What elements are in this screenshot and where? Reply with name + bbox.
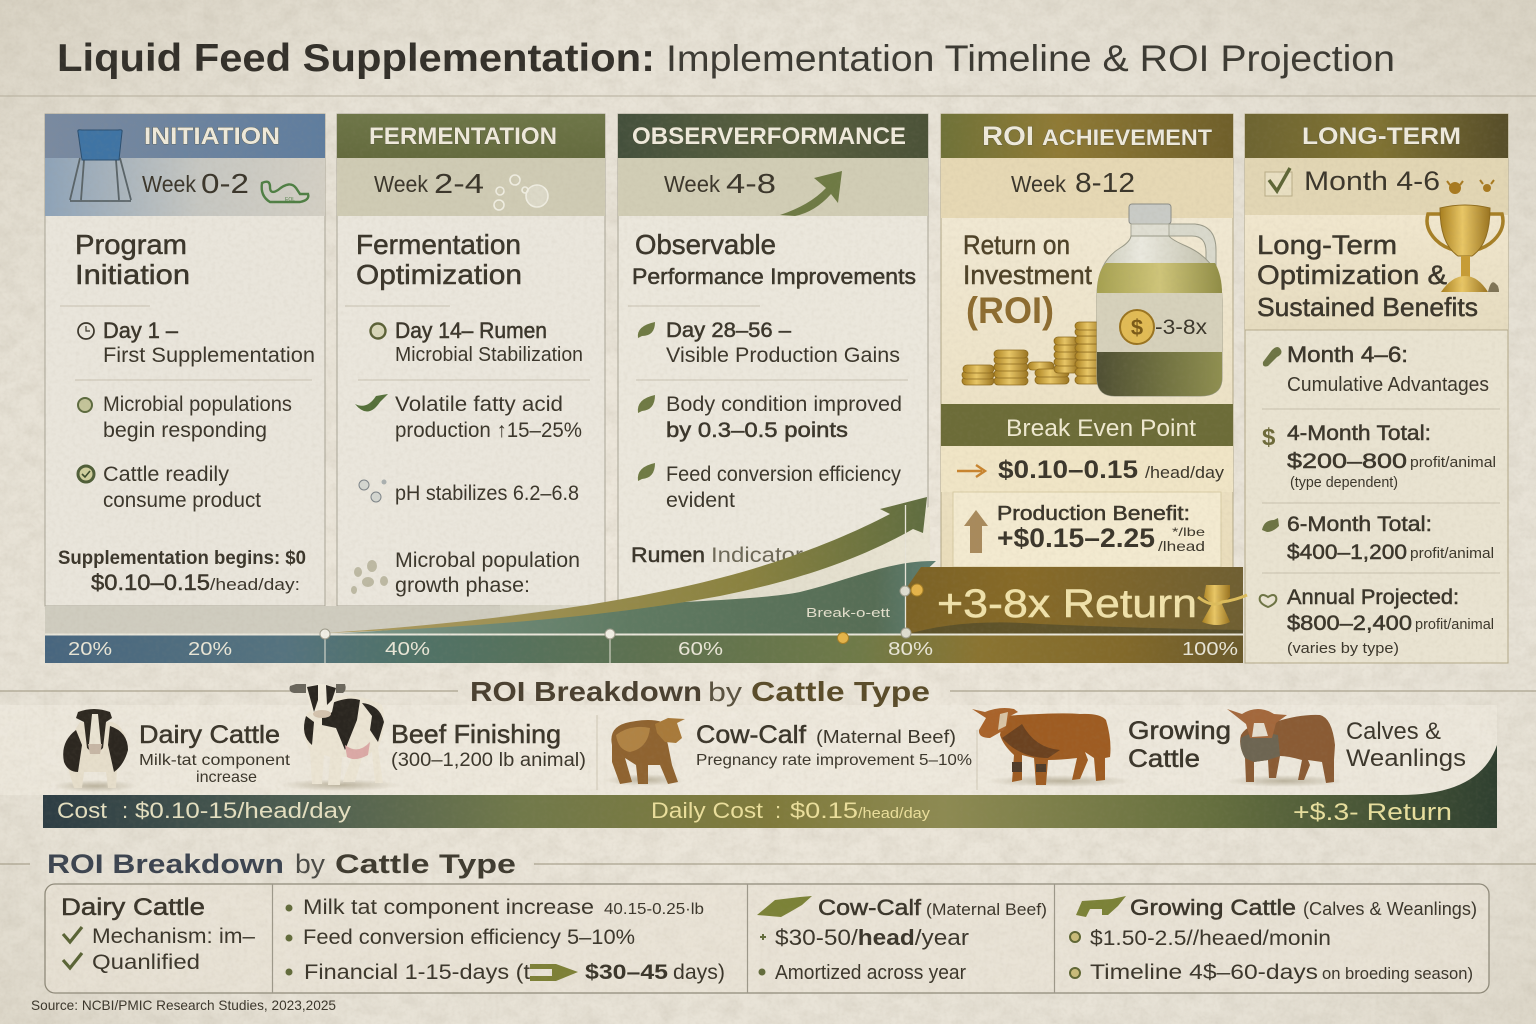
item: day 1: Day 1 – xyxy=(103,318,179,343)
section heading: ROI breakdown by cattle type (lower): ROI Breakdown xyxy=(47,849,284,879)
ribbon: cost left: : xyxy=(122,798,128,823)
item: rumen indicator: Rumen xyxy=(631,544,705,567)
item: day 14 xyxy=(370,318,583,366)
item: microbial xyxy=(78,393,292,442)
icon: bubbles xyxy=(494,175,548,210)
title: Implementation Timeline & ROI Projection xyxy=(666,38,1395,79)
item: annual projected: $800–2,400 xyxy=(1287,612,1412,635)
production benefit: +$0.15–2.25 xyxy=(997,523,1155,553)
section heading: ROI breakdown by cattle type (lower): by xyxy=(295,849,326,879)
cattle type: cow-calf label: (Maternal Beef) xyxy=(816,727,956,747)
week label: Week xyxy=(1011,171,1066,197)
item: annual projected xyxy=(1260,586,1494,657)
ribbon: cost left: Cost xyxy=(57,798,107,823)
week label: 4-8 xyxy=(726,168,776,199)
item: annual projected: profit/animal xyxy=(1415,616,1494,633)
cow: beef finishing xyxy=(280,684,400,791)
cow: growing cattle xyxy=(972,708,1135,787)
timeline percent labels: 80% xyxy=(888,639,933,659)
table cell: dairy benefits xyxy=(286,896,725,984)
item: body condition: Body condition improved xyxy=(666,393,902,416)
icon: green badge xyxy=(262,182,308,203)
item: cattle consume: Cattle readily xyxy=(103,463,230,486)
icon: dollar coin with 3-8x: $ xyxy=(1131,315,1143,340)
heading: program initiation: Initiation xyxy=(75,259,190,290)
table cell: cow-calf: Cow-Calf xyxy=(818,895,922,920)
section heading: ROI breakdown by cattle type (upper): Cattle Type xyxy=(751,676,930,707)
supplementation cost: Supplementation begins: $0 xyxy=(58,548,306,569)
title: Liquid Feed Supplementation: xyxy=(57,37,655,80)
month label: Month 4-6 xyxy=(1304,166,1440,196)
heading: observable performance improvements: Performance Improvements xyxy=(632,264,916,289)
item: microbial growth xyxy=(351,549,580,597)
ribbon: daily cost xyxy=(651,798,931,823)
heading: ROI ACHIEVEMENT xyxy=(982,121,1213,151)
item: feed conversion: evident xyxy=(666,489,735,512)
table cell: cow-calf: Amortized across year xyxy=(775,962,966,984)
ribbon: return: +$.3- Return xyxy=(1293,799,1452,826)
cattle type: dairy label: Dairy Cattle xyxy=(139,721,280,749)
icon: gold funnel xyxy=(1198,585,1247,625)
cattle type: growing cattle label: Cattle xyxy=(1128,745,1200,773)
week label xyxy=(664,168,776,199)
item: rumen indicator xyxy=(631,544,803,567)
heading: ROI ACHIEVEMENT: ROI xyxy=(982,121,1034,151)
timeline progress bar xyxy=(45,497,1247,663)
chart: +3-8x return block xyxy=(905,567,1243,635)
break even header: Break Even Point xyxy=(1006,415,1196,442)
item: pH: pH stabilizes 6.2–6.8 xyxy=(395,482,579,505)
item: day 28-56: Visible Production Gains xyxy=(666,344,900,367)
heading: LONG-TERM: LONG-TERM xyxy=(1302,123,1461,150)
heading: fermentation optimization: Optimization xyxy=(356,259,522,290)
ribbon: daily cost: : xyxy=(775,798,781,823)
heading: return on investment xyxy=(963,230,1092,331)
section heading: ROI breakdown by cattle type (upper) xyxy=(470,676,930,707)
heading: OBSERVERFORMANCE: OBSERVERFORMANCE xyxy=(632,123,906,150)
panel: initiation, week 0-2 xyxy=(45,114,325,606)
item: volatile fatty acid: production ↑15–25% xyxy=(395,419,582,442)
week label: 2-4 xyxy=(434,168,484,199)
supplementation cost: /head/day: xyxy=(210,575,300,594)
cattle type: growing cattle label xyxy=(1128,717,1231,773)
heading: observable performance improvements: Observable xyxy=(635,229,776,260)
heading: return on investment: (ROI) xyxy=(966,290,1054,331)
cattle type: growing cattle label: Growing xyxy=(1128,717,1231,745)
week label: Week xyxy=(374,171,428,197)
heading: program initiation: Program xyxy=(75,229,187,260)
production benefit: */lbe xyxy=(1172,525,1205,539)
item: volatile fatty acid: Volatile fatty acid xyxy=(395,393,563,416)
icon: dollar coin with 3-8x xyxy=(1120,310,1208,344)
icon: dollar coin with 3-8x: -3-8x xyxy=(1155,316,1208,339)
cattle type: dairy label: increase xyxy=(196,769,257,786)
item: microbial growth: growth phase: xyxy=(395,574,530,597)
cattle type: cow-calf label xyxy=(696,721,972,769)
item: 4-month total: $200–800 xyxy=(1287,450,1407,473)
cattle type: beef finishing label: Beef Finishing xyxy=(391,719,561,749)
table cell: dairy cattle: Mechanism: im– xyxy=(92,925,255,948)
item: microbial: begin responding xyxy=(103,419,267,442)
week label: Week xyxy=(142,171,196,197)
table cell: cow-calf xyxy=(757,895,1047,984)
heading: long-term optimization: Sustained Benefits xyxy=(1257,292,1478,322)
icon: gold coins xyxy=(962,322,1103,385)
ribbon: cost left: $0.10-15/head/day xyxy=(135,798,351,823)
item: body condition xyxy=(638,393,902,442)
timeline percent labels: 40% xyxy=(385,639,430,659)
heading: fermentation optimization: Fermentation xyxy=(356,229,521,260)
table cell: dairy cattle: Quanlified xyxy=(92,951,200,974)
heading: long-term optimization: Long-Term xyxy=(1257,230,1397,260)
item: 4-month total xyxy=(1262,422,1496,491)
table cell: dairy benefits: Financial 1-15-days (t xyxy=(304,961,530,984)
item: month 4-6 cumulative: Cumulative Advantages xyxy=(1287,374,1489,396)
heading: return on investment: Return on xyxy=(963,230,1070,260)
panel: long-term, month 4-6 xyxy=(1245,114,1508,663)
panel: ROI achievement, week 8-12 xyxy=(941,114,1233,606)
table cell: growing cattle: (Calves & Weanlings) xyxy=(1303,899,1477,919)
panel: fermentation, week 2-4 xyxy=(337,114,605,606)
callout: +3-8x return: +3-8x Return xyxy=(937,582,1197,626)
item: microbial: Microbial populations xyxy=(103,393,292,416)
section heading: ROI breakdown by cattle type (lower): Cattle Type xyxy=(335,849,516,879)
week label xyxy=(374,168,484,199)
table cell: dairy benefits: 40.15-0.25·lb xyxy=(604,901,704,918)
table cell: growing cattle: Timeline 4$–60-days xyxy=(1090,961,1318,984)
table cell: dairy benefits: Feed conversion efficiency 5–10% xyxy=(303,926,635,949)
ribbon: daily cost: Daily Cost xyxy=(651,798,763,823)
item: annual projected: Annual Projected: xyxy=(1287,586,1459,609)
supplementation cost xyxy=(58,548,306,595)
week label: 0-2 xyxy=(201,168,249,199)
chart: pale band under arrow xyxy=(500,505,930,616)
heading: FERMENTATION: FERMENTATION xyxy=(369,123,557,150)
cattle type: calves and weanlings label xyxy=(1346,718,1466,772)
icon: rising arrow xyxy=(780,171,842,216)
heading: return on investment: Investment xyxy=(963,260,1092,290)
item: day 28-56 xyxy=(638,319,900,367)
cattle type: beef finishing label: (300–1,200 lb animal) xyxy=(391,750,586,771)
ribbon: cost left xyxy=(57,798,351,823)
table cell: growing cattle: Growing Cattle xyxy=(1130,895,1296,920)
break-even marker label: Break-o-ett xyxy=(806,605,890,620)
week label xyxy=(142,168,249,199)
table cell: growing cattle xyxy=(1070,895,1477,984)
week label: Week xyxy=(664,171,720,197)
section heading: ROI breakdown by cattle type (upper): ROI Breakdown xyxy=(470,676,702,707)
item: day 28-56: Day 28–56 – xyxy=(666,319,791,342)
table cell: cow-calf: $30-50/ head /year xyxy=(775,925,969,950)
cattle type: cow-calf label: Pregnancy rate improvement 5–10% xyxy=(696,752,972,769)
production benefit: /lhead xyxy=(1158,538,1205,554)
table cell: cow-calf: (Maternal Beef) xyxy=(926,900,1047,919)
table cell: growing cattle: $1.50-2.5//heaed/monin xyxy=(1090,927,1331,950)
item: rumen indicator: Indicator xyxy=(711,544,803,567)
timeline percent labels: 60% xyxy=(678,639,723,659)
heading: ROI ACHIEVEMENT: ACHIEVEMENT xyxy=(1042,125,1213,150)
heading: long-term optimization xyxy=(1257,230,1478,322)
cow: cow-calf xyxy=(605,718,685,786)
panel: observable performance, week 4-8 xyxy=(618,114,928,606)
production benefit xyxy=(953,492,1221,567)
ribbon: daily cost: $0.15 xyxy=(790,798,858,823)
item: feed conversion: Feed conversion efficiency xyxy=(666,463,901,486)
item: month 4-6 cumulative: Month 4–6: xyxy=(1287,342,1408,367)
timeline nodes xyxy=(320,584,923,644)
item: 4-month total: 4-Month Total: xyxy=(1287,422,1431,445)
item: 6-month total: 6-Month Total: xyxy=(1287,513,1432,536)
cattle type: dairy label: Milk-tat component xyxy=(139,752,291,769)
cattle type: beef finishing label xyxy=(391,719,586,771)
timeline percent labels: 100% xyxy=(1182,639,1238,659)
break even value: $0.10–0.15 xyxy=(998,456,1138,484)
table cell: dairy benefits: Milk tat component increase xyxy=(303,896,594,919)
table cell: dairy benefits: days) xyxy=(673,961,725,984)
item: 4-month total: (type dependent) xyxy=(1290,474,1398,491)
source note: Source: NCBI/PMIC Research Studies, 2023,2025 xyxy=(31,997,336,1013)
icon: liquid feed jug xyxy=(1097,204,1222,396)
week label xyxy=(1011,167,1135,198)
week label: 8-12 xyxy=(1075,167,1135,198)
item: day 14: Microbial Stabilization xyxy=(395,344,583,366)
ribbon: daily cost: /head/day xyxy=(858,805,931,822)
heading: INITIATION: INITIATION xyxy=(144,123,280,150)
timeline percent labels: 20% xyxy=(188,639,232,659)
chart: rising arrow xyxy=(325,497,927,633)
item: annual projected: (varies by type) xyxy=(1287,640,1399,657)
cow: calves and weanlings xyxy=(1225,709,1345,787)
table cell: growing cattle: on broeding season) xyxy=(1322,964,1473,983)
item: cattle consume: consume product xyxy=(103,489,261,512)
break even value xyxy=(941,446,1233,492)
item: 6-month total: $400–1,200 xyxy=(1287,541,1407,564)
title xyxy=(57,37,1395,80)
production benefit: Production Benefit: xyxy=(997,503,1190,525)
supplementation cost: $0.10–0.15 xyxy=(91,570,210,595)
timeline percent labels: 20% xyxy=(68,639,112,659)
item: 4-month total: $ xyxy=(1262,424,1276,451)
icon: feed tank xyxy=(70,130,131,201)
break even header xyxy=(941,404,1233,446)
item: day 1 xyxy=(78,318,315,367)
item: body condition: by 0.3–0.5 points xyxy=(666,419,848,442)
item: day 1: First Supplementation xyxy=(103,344,315,367)
table cell: dairy benefits: $30–45 xyxy=(585,961,668,984)
item: cattle consume xyxy=(78,463,261,512)
section heading: ROI breakdown by cattle type (lower) xyxy=(47,849,516,879)
cattle type: cow-calf label: Cow-Calf xyxy=(696,721,806,749)
cattle type: calves and weanlings label: Weanlings xyxy=(1346,745,1466,772)
cattle type: calves and weanlings label: Calves & xyxy=(1346,718,1441,745)
item: 4-month total: profit/animal xyxy=(1410,454,1496,471)
heading: program initiation xyxy=(75,229,190,290)
table: ROI breakdown xyxy=(45,884,1489,993)
icon: green badge: EOL xyxy=(285,197,295,203)
icon: gold trophy xyxy=(1427,205,1503,292)
table cell: dairy cattle: Dairy Cattle xyxy=(61,894,205,921)
cow: dairy cattle xyxy=(53,709,137,792)
item: 6-month total: profit/animal xyxy=(1410,545,1494,562)
item: volatile fatty acid xyxy=(355,393,582,442)
item: 6-month total xyxy=(1262,513,1494,564)
item: feed conversion xyxy=(638,463,901,512)
section heading: ROI breakdown by cattle type (upper): by xyxy=(708,677,743,707)
heading: long-term optimization: Optimization & xyxy=(1257,260,1447,290)
item: day 14: Day 14– Rumen xyxy=(395,318,547,343)
cattle type: dairy label xyxy=(139,721,291,786)
icon: gold sparks xyxy=(1447,180,1494,194)
heading: observable performance improvements xyxy=(632,229,916,289)
item: month 4-6 cumulative xyxy=(1263,342,1489,396)
icon: check box xyxy=(1265,168,1292,196)
ribbon: cost bar xyxy=(43,745,1497,828)
chart: green growth wave xyxy=(325,561,936,635)
heading: fermentation optimization xyxy=(356,229,522,290)
table cell: dairy cattle xyxy=(61,894,255,974)
item: microbial growth: Microbal population xyxy=(395,549,580,572)
timeline percent labels xyxy=(68,639,1238,659)
break even value: /head/day xyxy=(1145,463,1225,482)
